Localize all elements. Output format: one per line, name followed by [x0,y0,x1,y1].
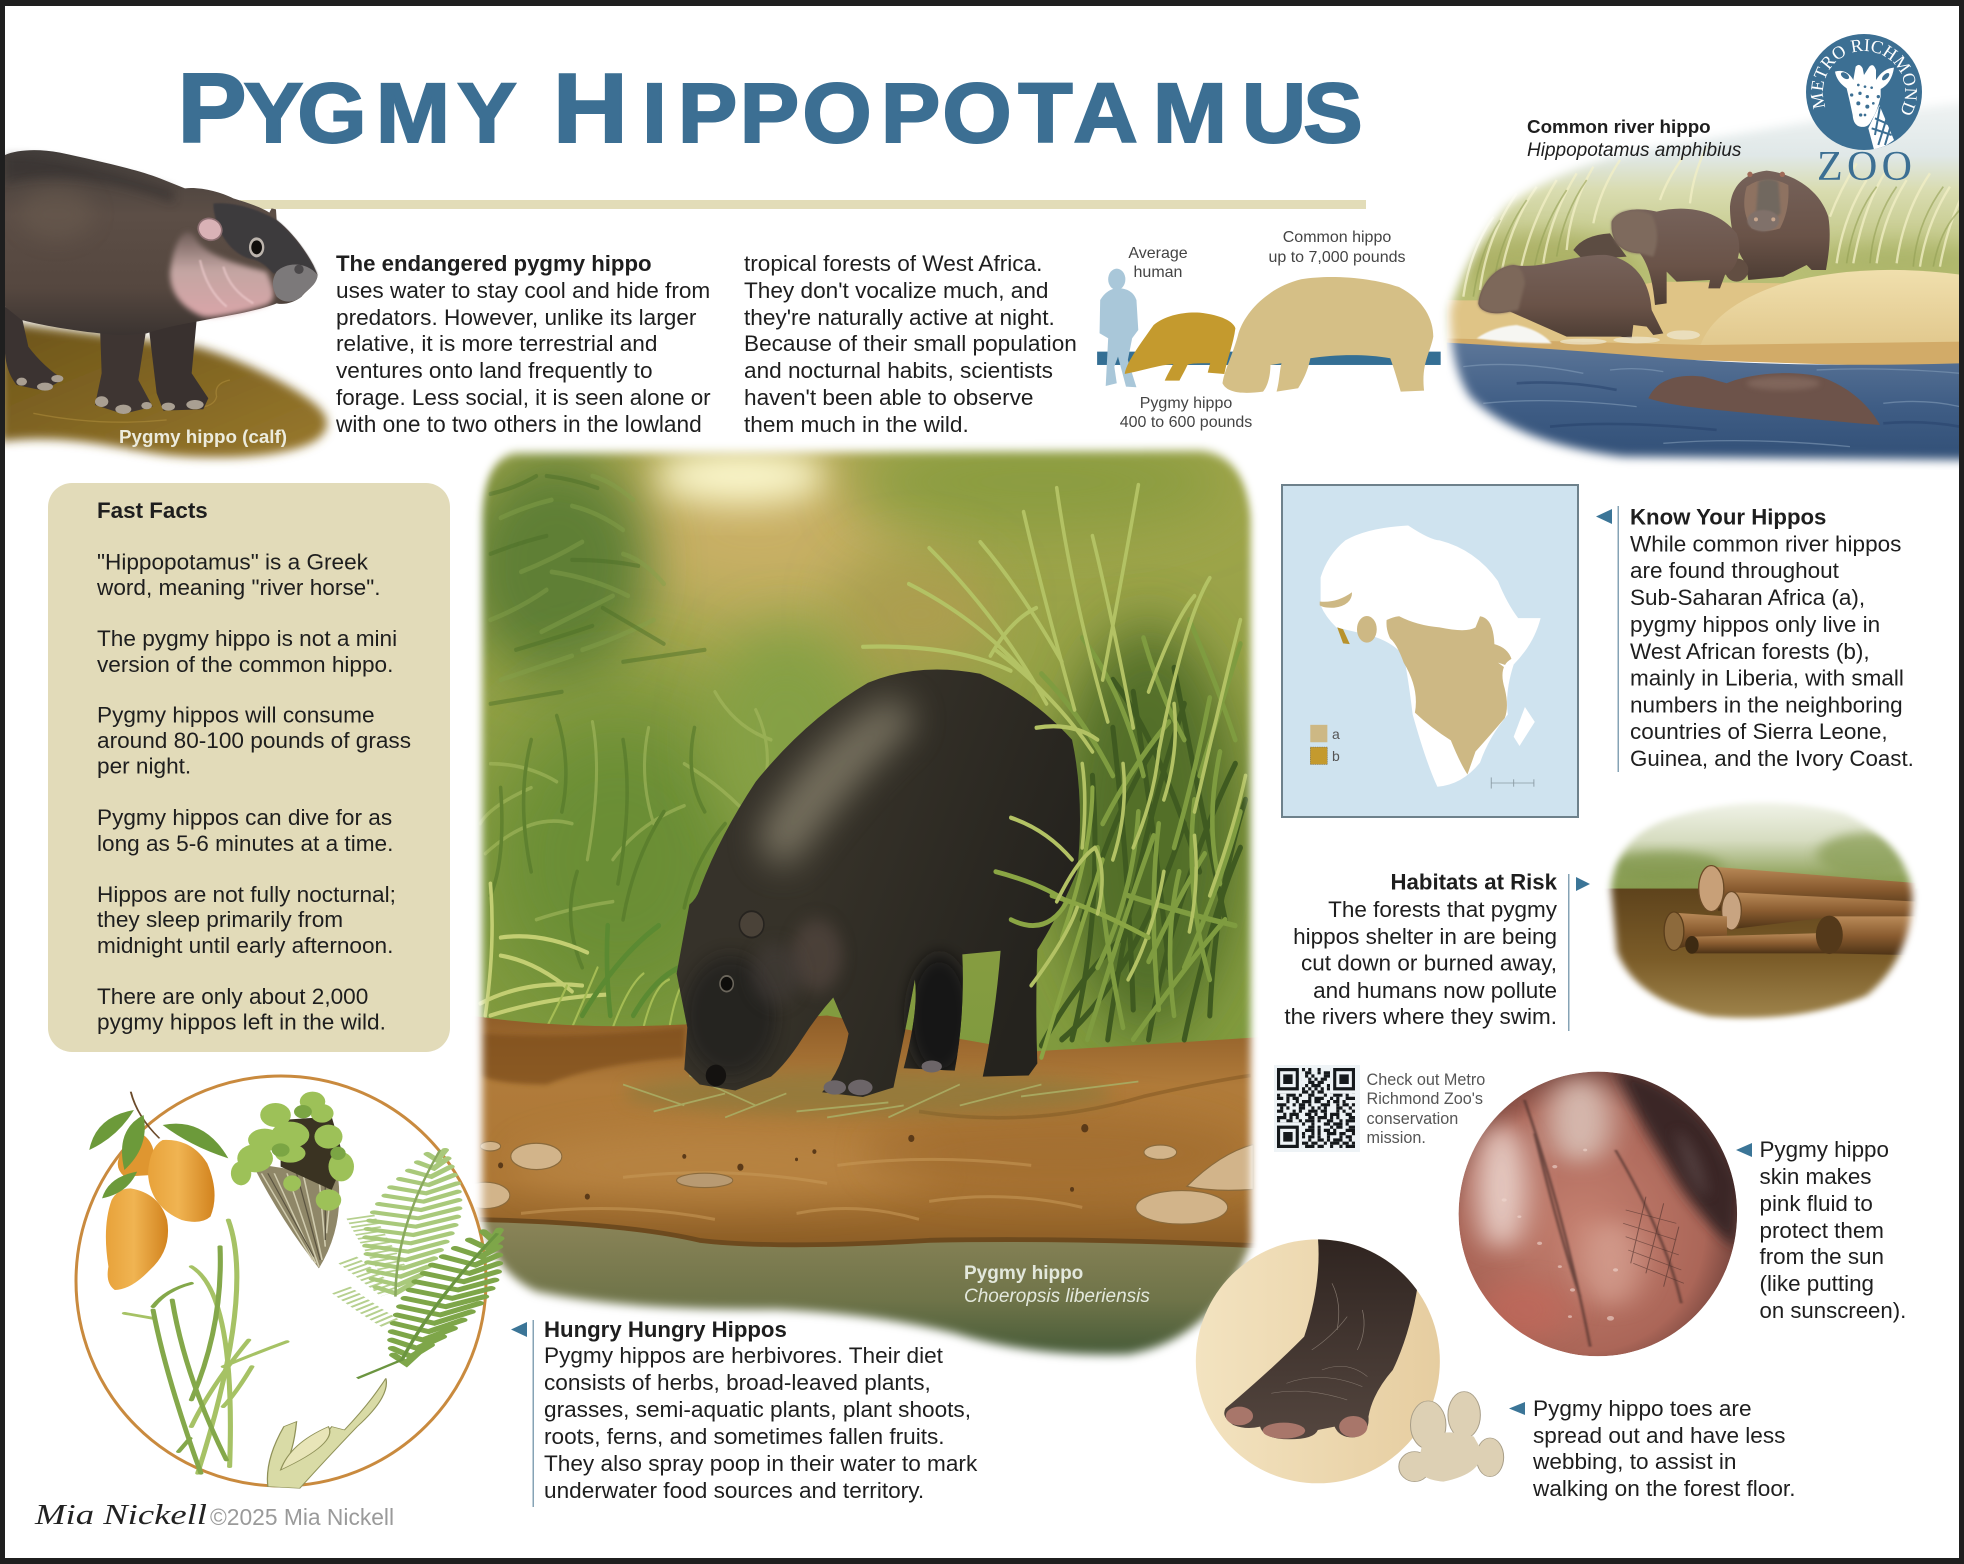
panel: skin note: from the sun [1760,1244,1884,1269]
label: pygmy hippo species: Pygmy hippo [964,1263,1083,1284]
panel: fast facts: they sleep primarily from [97,907,343,932]
map: hippo ranges in Africa [1282,485,1578,817]
QR caption [1366,1071,1485,1147]
panel: know your hippos: numbers in the neighboring [1630,692,1903,718]
calf muzzle [273,265,318,302]
arrow: left [1596,509,1612,524]
calf body [5,150,318,335]
intro text: forage. Less social, it is seen alone or [336,385,711,410]
intro text: them much in the wild. [744,412,969,437]
map: hippo ranges in Africa: b [1332,748,1340,764]
size comparison chart: Pygmy hippo [1140,395,1232,412]
size comparison chart: Common hippo [1283,229,1391,246]
arrow: right [1576,877,1590,891]
small pale fronds [341,1217,395,1323]
illustration: felled logs [1601,789,1925,1029]
hippo rear [1730,171,1830,280]
calf rear leg [5,307,63,391]
signature: Mia Nickell [34,1500,207,1531]
calf head [213,203,318,275]
splash [1477,325,1552,343]
forest background [465,434,1270,1069]
panel: fast facts: Pygmy hippos will consume [97,702,375,728]
illustration: hippo foot [1196,1237,1440,1483]
icon: ferns [341,1150,500,1378]
panel: hungry hungry hippos: roots, ferns, and sometimes fallen fruits. [544,1424,945,1449]
panel: fast facts: Pygmy hippos can dive for as [97,805,392,830]
intro text: haven't been able to observe [744,385,1033,410]
panel: habitats at risk: the rivers where they swim. [1284,1004,1557,1029]
map: Africa landmass [1321,526,1541,787]
calf ground [0,322,327,458]
panel: know your hippos: While common river hippos [1630,532,1901,556]
panel: fast facts: long as 5-6 minutes at a time. [97,831,393,856]
hippo toes [824,1060,942,1095]
intro text: predators. However, unlike its larger [336,305,697,330]
illustration: pygmy hippo calf [0,150,327,458]
dark skin upper right [1616,1070,1742,1250]
panel: know your hippos: countries of Sierra Leone, [1630,719,1888,744]
title: YGMY [244,67,534,160]
label: common hippo: Common river hippo [1527,116,1711,137]
signature: ©2025 Mia Nickell [210,1504,394,1530]
panel: toes note: spread out and have less [1533,1423,1785,1448]
logs [1664,866,1916,955]
sand bank [1447,282,1783,347]
intro text: The endangered pygmy hippo [336,251,652,276]
arrow: left [1509,1402,1525,1415]
panel: toes note: webbing, to assist in [1532,1449,1736,1474]
label: pygmy hippo species [964,1263,1150,1307]
panel: know your hippos: Sub-Saharan Africa (a), [1630,585,1865,610]
panel: habitats at risk: The forests that pygmy [1328,897,1558,922]
panel: fast facts: Hippos are not fully nocturnal; [97,882,396,907]
panel: skin note: protect them [1760,1218,1884,1243]
hippo front [1478,255,1663,338]
hippo middle [1612,209,1739,305]
diet ring [76,1076,486,1486]
panel: habitats at risk: and humans now pollute [1313,978,1557,1003]
panel: skin note: (like putting [1760,1271,1874,1296]
title: P [177,55,247,163]
panel: skin note: pink fluid to [1760,1191,1873,1216]
size comparison chart [1097,229,1441,431]
panel: skin note: Pygmy hippo [1760,1137,1889,1162]
panel: habitats at risk: hippos shelter in are being [1293,924,1557,949]
river scene background [1430,93,1964,470]
ground [470,1016,1270,1249]
pale highlights [1547,1077,1613,1163]
panel: toes note: walking on the forest floor. [1532,1476,1796,1501]
map: range a [1310,592,1511,774]
map: range b [1337,627,1350,644]
icon: aquatic plant [231,1092,354,1268]
panel: fast facts: There are only about 2,000 [97,984,368,1009]
signature [34,1500,394,1531]
hippo nostril [706,1065,726,1086]
panel: fast facts: Fast Facts [97,498,208,523]
label: common hippo [1527,116,1742,161]
fern frond upper [366,1150,459,1293]
panel: habitats at risk: cut down or burned away, [1301,950,1557,976]
skin creases [1524,1100,1681,1347]
logo: Metro Richmond Zoo [1806,34,1922,190]
QR caption: Check out Metro [1366,1071,1485,1089]
icon: mangoes [89,1092,228,1290]
panel: fast facts: version of the common hippo. [97,652,393,677]
panel: know your hippos: Guinea, and the Ivory Coast. [1630,746,1914,771]
calf eye [249,237,264,257]
intro text: they're naturally active at night. [744,305,1055,330]
foot toes [1226,1407,1367,1439]
panel: skin note [1736,1137,1906,1323]
panel: hungry hungry hippos [511,1317,978,1507]
icon: footprint [1399,1392,1504,1482]
size comparison chart: human [1134,264,1182,281]
icon: grass [124,1220,287,1473]
panel: toes note [1509,1396,1796,1501]
label: calf: Pygmy hippo (calf) [119,426,287,447]
panel: fast facts: per night. [97,754,191,778]
icon: giraffe [1835,65,1894,153]
chart silhouettes [1097,269,1441,393]
panel: hungry hungry hippos: consists of herbs, broad-leaved plants, [544,1370,931,1395]
map: scale bar [1491,777,1534,789]
grass under hippo [623,1072,1113,1115]
label: common hippo: Hippopotamus amphibius [1527,140,1742,161]
pebbles [498,1124,1088,1200]
grass clump blades [863,485,1246,1045]
panel: fast facts: pygmy hippos left in the wild. [97,1010,386,1034]
water [480,1222,1255,1362]
panel: hungry hungry hippos: grasses, semi-aquatic plants, plant shoots, [544,1397,971,1422]
tree foliage [490,476,664,680]
panel: hungry hungry hippos: underwater food sources and territory. [544,1478,924,1503]
calf far front leg [148,320,208,411]
panel: hungry hungry hippos: Hungry Hungry Hippos [544,1317,787,1342]
hippo body [677,669,1080,1097]
skin pores [1502,1149,1618,1321]
panel: fast facts: around 80-100 pounds of grass [97,728,411,753]
panel: hungry hungry hippos: They also spray poop in their water to mark [544,1451,978,1476]
panel: habitats at risk: Habitats at Risk [1391,870,1558,894]
map: legend letters: a [1332,726,1340,742]
intro text: They don't vocalize much, and [744,278,1048,303]
panel: skin note: on sunscreen). [1760,1298,1906,1323]
panel: toes note: Pygmy hippo toes are [1533,1396,1752,1421]
panel: know your hippos: West African forests (b), [1630,639,1870,664]
calf toes [16,375,204,414]
hippo shading [684,703,970,1075]
hippo behind [1573,233,1627,260]
swimming hippo [1648,373,1880,425]
illustration: common river hippos [1430,93,1964,470]
calf ear [195,215,225,244]
QR caption: conservation [1366,1110,1458,1128]
reeds [1463,147,1960,297]
QR caption: Richmond Zoo's [1366,1090,1483,1108]
panel: habitats at risk [1284,870,1590,1031]
label: pygmy hippo species: Choeropsis liberiensis [964,1286,1150,1307]
grass clump backdrop [1057,626,1240,1034]
river water [1447,343,1963,470]
rocks [461,1141,1253,1224]
logo: Metro Richmond Zoo: METRO RICHMOND [1810,39,1917,115]
hippo ear [739,911,764,938]
panel: know your hippos [1596,504,1914,772]
arrow: left [1736,1143,1752,1157]
panel: fast facts [48,483,450,1052]
panel: know your hippos: mainly in Liberia, with small [1630,666,1904,690]
illustration: pygmy hippo in forest [461,434,1270,1380]
size comparison chart: 400 to 600 pounds [1120,414,1252,431]
QR code [1274,1065,1360,1152]
panel: know your hippos: pygmy hippos only live in [1630,612,1880,637]
chart labels: Average [1128,245,1188,262]
size comparison chart: up to 7,000 pounds [1268,249,1406,266]
intro text: relative, it is more terrestrial and [336,331,657,356]
panel: fast facts: "Hippopotamus" is a Greek [97,550,369,574]
hippo eye [720,976,733,992]
intro text: tropical forests of West Africa. [744,251,1042,276]
background fronds [480,692,771,968]
title rule [240,200,1366,209]
panel: know your hippos: Know Your Hippos [1630,504,1826,530]
title: IPPOPOTAMUS [642,67,1363,160]
intro text: and nocturnal habits, scientists [744,358,1053,383]
foot background [1196,1239,1440,1483]
QR caption: mission. [1366,1129,1426,1147]
calf near front leg [95,327,153,414]
intro text: ventures onto land frequently to [336,358,653,383]
intro text: uses water to stay cool and hide from [336,278,710,303]
calf throat [170,232,274,317]
plant diet circle [76,1076,500,1488]
panel: fast facts: The pygmy hippo is not a mini [97,626,397,651]
intro text: Because of their small population [744,331,1077,356]
fern frond lower [392,1230,500,1363]
title: H [553,55,628,163]
panel: know your hippos: are found throughout [1630,558,1840,583]
foot [1224,1237,1418,1439]
intro text [335,251,1077,437]
panel: fast facts: word, meaning "river horse". [96,575,381,600]
illustration: skin closeup [1459,1070,1742,1356]
grass blades over hippo [996,726,1149,1057]
arrow: left [511,1322,527,1337]
logo: Metro Richmond Zoo: ZOO [1817,144,1912,190]
icon: root [267,1378,386,1488]
intro text: with one to two others in the lowland [335,411,702,437]
panel: hungry hungry hippos: Pygmy hippos are herbivores. Their diet [544,1343,944,1368]
foreground grass left [480,884,684,1031]
panel: fast facts: midnight until early afternoon. [97,933,393,958]
panel: skin note: skin makes [1760,1164,1872,1189]
